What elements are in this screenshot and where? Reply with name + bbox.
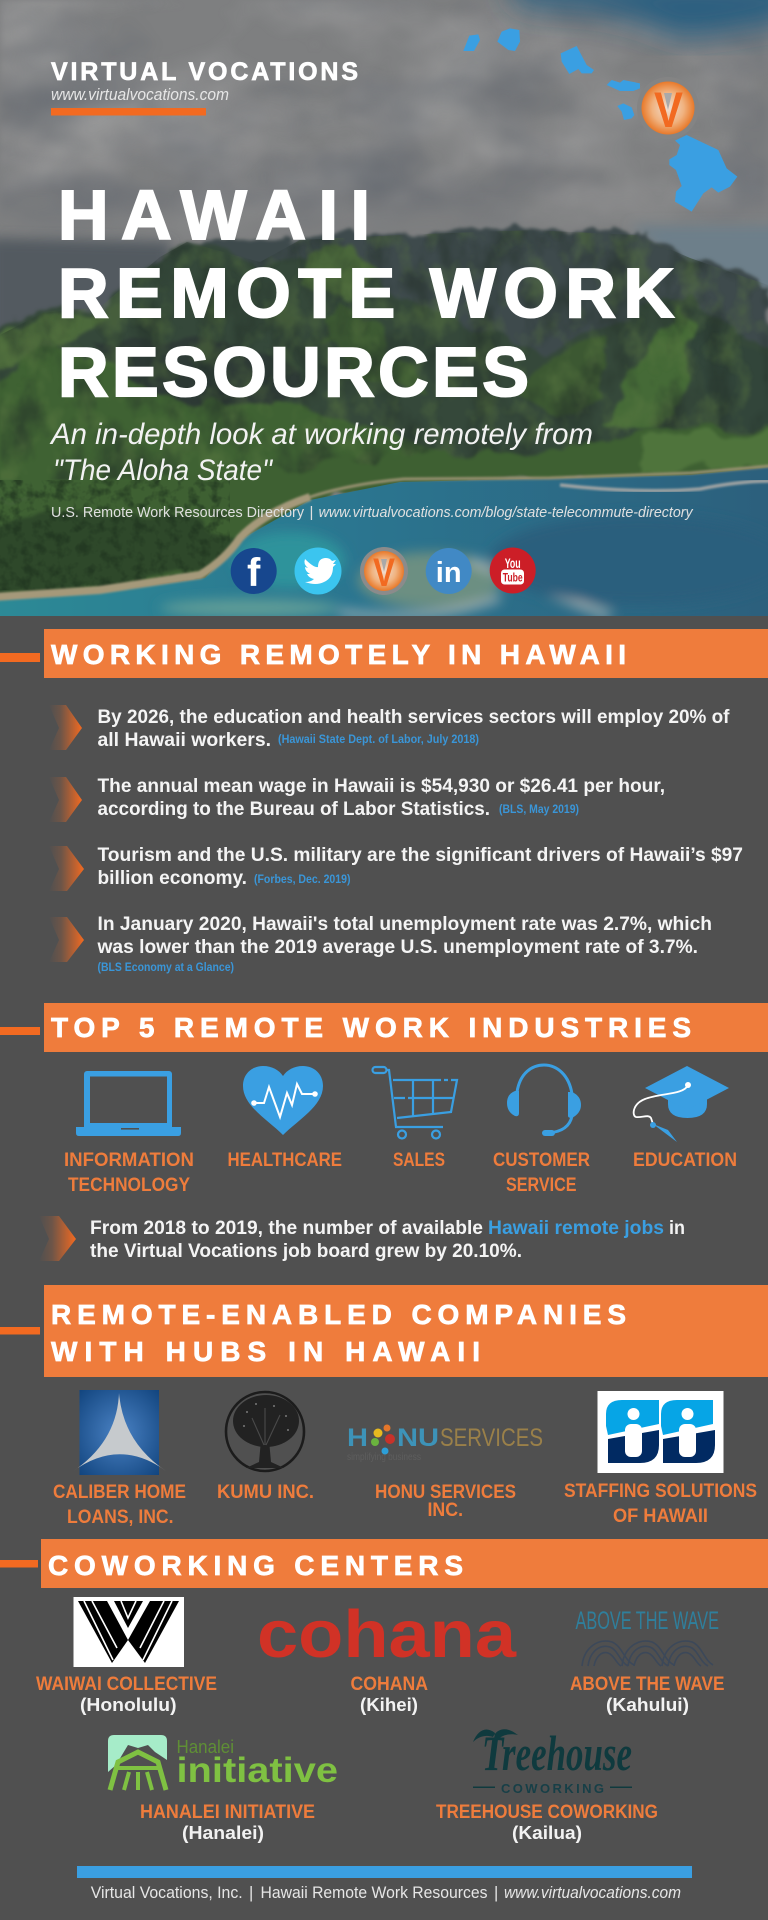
center: Waiwai Collective: [36, 1597, 217, 1715]
industry: information technology: TECHNOLOGY: [68, 1175, 190, 1196]
bullet: education and health: By 2026, the education and health services sectors will employ 20% of: [98, 707, 730, 728]
industry: customer service: CUSTOMER: [493, 1150, 590, 1171]
heading: [44, 1003, 768, 1052]
center: Treehouse Coworking: TREEHOUSE COWORKING: [436, 1802, 658, 1823]
callout: remote jobs growth: Hawaii remote jobs: [488, 1218, 664, 1239]
icon: youtube: Tube: [503, 570, 523, 584]
logo: Cohana: cohana: [257, 1597, 517, 1672]
footer text: |: [249, 1884, 253, 1902]
logo label: Virtual Vocations: www.virtualvocations.com: [51, 86, 229, 104]
logo: Hanalei Initiative: Hanalei: [176, 1737, 234, 1757]
icon: twitter: [294, 548, 342, 594]
logo label: Virtual Vocations: VIRTUAL VOCATIONS: [51, 58, 358, 86]
icon: map of Hawaiian islands: V: [654, 82, 684, 138]
center: Above the Wave: [570, 1607, 724, 1715]
logo: Honu Services: [347, 1424, 543, 1463]
logo: Above the Wave: [576, 1607, 719, 1666]
bullet: annual mean wage: according to the Bureau of Labor Statistics.: [98, 799, 490, 820]
icon: heart with pulse: [243, 1066, 323, 1135]
bullet: tourism and military: (Forbes, Dec. 2019): [254, 874, 351, 886]
callout: remote jobs growth: the Virtual Vocations job board grew by 20.10%.: [90, 1241, 522, 1262]
bullet: unemployment rate: (BLS Economy at a Glance): [98, 962, 234, 974]
heading: WITH HUBS IN HAWAII: [51, 1336, 480, 1367]
industry: sales: [372, 1067, 457, 1171]
bay water: [0, 466, 768, 620]
industry: healthcare: HEALTHCARE: [228, 1150, 342, 1171]
company: Kumu: KUMU INC.: [217, 1482, 314, 1503]
logo: Staffing Solutions: [598, 1391, 724, 1473]
callout: remote jobs growth: [39, 1216, 685, 1262]
title: HAWAII: [58, 176, 370, 254]
bullet: education and health: [49, 705, 730, 751]
logo label: Virtual Vocations: [51, 58, 358, 116]
callout: remote jobs growth: in: [669, 1218, 685, 1239]
company: Kumu: [217, 1392, 314, 1503]
icon: map of Hawaiian islands: [463, 28, 737, 212]
center: Above the Wave: (Kahului): [606, 1694, 689, 1715]
icon: facebook: f: [247, 551, 261, 595]
bullet: tourism and military: billion economy.: [98, 868, 247, 889]
industry: customer service: SERVICE: [506, 1175, 576, 1196]
company: Honu Services: INC.: [428, 1500, 463, 1521]
heading: [44, 629, 768, 678]
directory link line: www.virtualvocations.com/blog/state-telecommute-directory: [319, 504, 694, 521]
bullet: education and health: all Hawaii workers.: [98, 730, 271, 751]
company: Caliber Home Loans: CALIBER HOME: [53, 1482, 186, 1503]
logo: Honu Services: SERVICES: [440, 1424, 543, 1452]
logo: Treehouse Coworking: Treehouse: [482, 1725, 632, 1781]
directory link line: [51, 504, 694, 521]
subtitle: An in-depth look at working remotely from: [49, 418, 593, 451]
company: Staffing Solutions of Hawaii: [564, 1391, 757, 1527]
bullet: unemployment rate: In January 2020, Hawaii's total unemployment rate was 2.7%, which: [98, 914, 712, 935]
industry: education: [633, 1066, 737, 1171]
industry: healthcare: [228, 1066, 342, 1171]
center: Treehouse Coworking: (Kailua): [512, 1822, 582, 1843]
center: Treehouse Coworking: [436, 1725, 658, 1843]
icon: youtube: You: [505, 556, 521, 571]
bullet: unemployment rate: [49, 914, 712, 974]
industry: information technology: [64, 1071, 194, 1196]
footer text: Virtual Vocations, Inc.: [91, 1884, 243, 1902]
footer text: [91, 1884, 681, 1902]
logo: Caliber: [72, 1390, 166, 1475]
center: Hanalei Initiative: (Hanalei): [182, 1822, 264, 1843]
logo: Treehouse Coworking: [473, 1725, 632, 1796]
company: Caliber Home Loans: [53, 1390, 186, 1528]
bullet: annual mean wage: The annual mean wage in Hawaii is $54,930 or $26.41 per hour,: [98, 776, 665, 797]
center: Hanalei Initiative: HANALEI INITIATIVE: [140, 1802, 315, 1823]
bullet: tourism and military: [49, 845, 743, 891]
bullet: annual mean wage: (BLS, May 2019): [499, 804, 579, 816]
company: Staffing Solutions of Hawaii: OF HAWAII: [613, 1506, 708, 1527]
directory link line: |: [310, 504, 313, 521]
title: RESOURCES: [58, 333, 529, 411]
lowland forest: [0, 428, 768, 604]
title: [58, 176, 674, 411]
heading: COWORKING CENTERS: [48, 1550, 463, 1581]
center: Waiwai Collective: WAIWAI COLLECTIVE: [36, 1674, 217, 1695]
icon: youtube: [490, 548, 536, 594]
center: Cohana: (Kihei): [360, 1694, 418, 1715]
callout: remote jobs growth: From 2018 to 2019, the number of available: [90, 1218, 483, 1239]
title: REMOTE WORK: [58, 254, 674, 332]
center: Hanalei Initiative: [108, 1735, 338, 1843]
bullet: unemployment rate: was lower than the 2019 average U.S. unemployment rate of 3.7%.: [96, 937, 698, 958]
logo: Hanalei Initiative: initiative: [176, 1751, 338, 1790]
directory link line: U.S. Remote Work Resources Directory: [51, 504, 304, 521]
logo: Waiwai: [74, 1597, 184, 1667]
hero photo: clouds, mountains and bay: [0, 0, 768, 620]
bullet: education and health: (Hawaii State Dept. of Labor, July 2018): [278, 734, 479, 746]
logo: Treehouse Coworking: COWORKING: [501, 1781, 604, 1796]
center: Cohana: COHANA: [350, 1674, 428, 1695]
icon: linkedin: [426, 548, 472, 594]
heading: REMOTE-ENABLED COMPANIES: [51, 1299, 626, 1330]
icon: headset: [507, 1065, 581, 1136]
icon: linkedin: in: [436, 557, 462, 589]
footer bar: [77, 1866, 692, 1878]
mountains: [0, 228, 768, 500]
beach: [0, 466, 768, 597]
panel: top 5 remote work industries: [0, 1003, 768, 1262]
company: Honu Services: [347, 1424, 543, 1521]
heading: WORKING REMOTELY IN HAWAII: [51, 639, 626, 670]
logo: Honu Services: H: [347, 1424, 368, 1452]
icon: Virtual Vocations: V: [373, 551, 395, 595]
icon: Virtual Vocations: [360, 547, 408, 595]
icon: facebook: [231, 548, 277, 595]
company: Honu Services: HONU SERVICES: [375, 1482, 516, 1503]
industry: education: EDUCATION: [633, 1150, 737, 1171]
social icons: [231, 547, 536, 595]
logo: Honu Services: NU: [397, 1424, 439, 1452]
center: Above the Wave: ABOVE THE WAVE: [570, 1674, 724, 1695]
footer text: |: [494, 1884, 498, 1902]
industry: customer service: [493, 1065, 590, 1196]
logo: Honu Services: simplifying business: [347, 1452, 421, 1463]
company: Caliber Home Loans: LOANS, INC.: [67, 1507, 174, 1528]
subtitle: [49, 418, 593, 487]
center: Cohana: [257, 1597, 517, 1715]
panel: remote-enabled companies: [0, 1285, 768, 1528]
bullet: annual mean wage: [49, 776, 665, 822]
center: Waiwai Collective: (Honolulu): [80, 1694, 176, 1715]
heading: TOP 5 REMOTE WORK INDUSTRIES: [51, 1012, 691, 1043]
industry: sales: SALES: [393, 1150, 445, 1171]
panel: working remotely in Hawaii: [0, 629, 768, 974]
bullet: tourism and military: Tourism and the U.S. military are the significant drivers of Hawaii’s $97: [98, 845, 743, 866]
icon: laptop: [76, 1071, 181, 1136]
heading: [41, 1539, 768, 1588]
heading: [44, 1285, 768, 1377]
industry: information technology: INFORMATION: [64, 1150, 194, 1171]
company: Staffing Solutions of Hawaii: STAFFING SOLUTIONS: [564, 1481, 757, 1502]
panel: coworking centers: [0, 1539, 768, 1843]
footer text: www.virtualvocations.com: [504, 1884, 681, 1902]
icon: shopping cart: [372, 1067, 457, 1138]
footer text: Hawaii Remote Work Resources: [260, 1884, 488, 1902]
logo: Kumu tree: [226, 1392, 304, 1471]
icon: graduation cap: [634, 1066, 729, 1142]
logo: Hanalei Initiative: [108, 1735, 338, 1790]
subtitle: "The Aloha State": [53, 454, 273, 487]
